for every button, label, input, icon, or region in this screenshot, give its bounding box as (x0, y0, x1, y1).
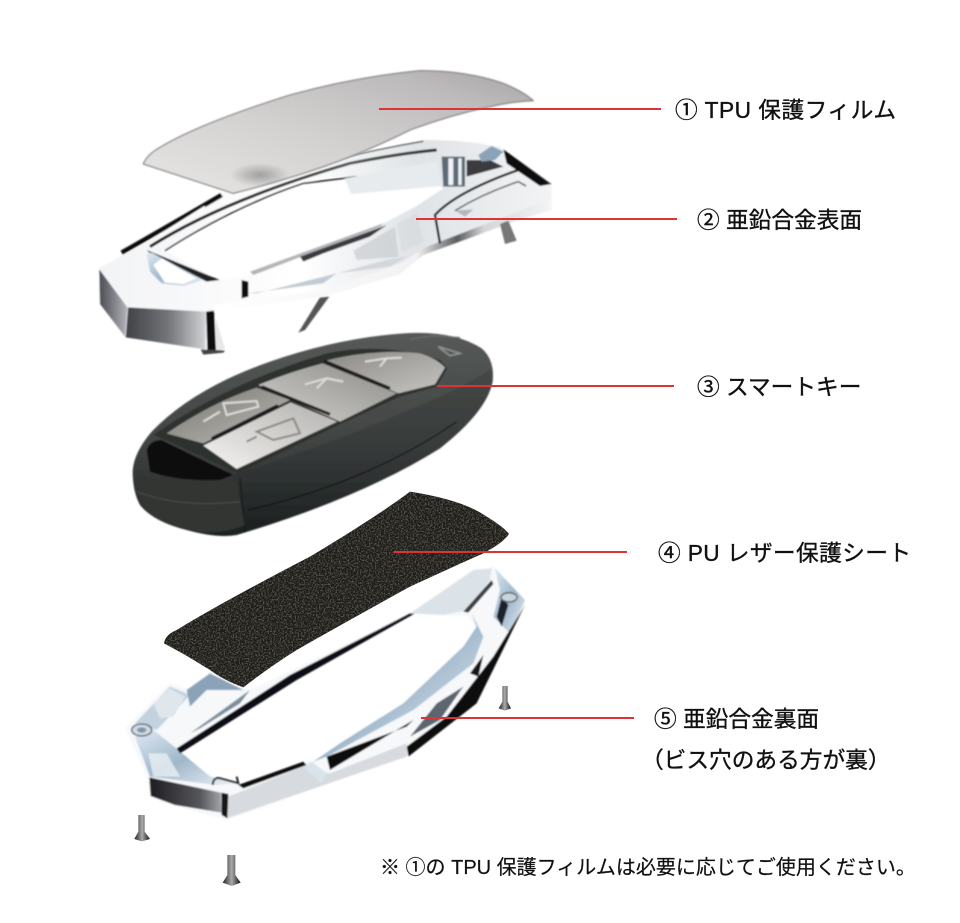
button glyphs (203, 358, 402, 442)
leader line 4 (394, 551, 627, 553)
black rim inner left (177, 613, 415, 753)
lower left hole (132, 724, 152, 736)
centre front face (126, 307, 205, 349)
bevel metallic bands (135, 687, 190, 730)
screw: right (499, 686, 511, 711)
support tabs (298, 297, 329, 333)
label 4: ④ PU レザー保護シート (658, 540, 911, 566)
blade end cap (147, 440, 233, 480)
button: upper left (167, 388, 290, 443)
leader line 5 (421, 717, 634, 719)
upper right tab (410, 568, 492, 615)
upper right hole (501, 593, 517, 602)
footnote: ※ ①の TPU 保護フィルムは必要に応じてご使用ください。 (380, 856, 916, 879)
frame body (99, 140, 552, 350)
label 3: ③ スマートキー (697, 374, 861, 400)
right rail (313, 613, 483, 762)
button: middle (258, 363, 397, 422)
screw: lower left (134, 815, 150, 841)
end-cap opening (147, 250, 220, 282)
lower rail black (238, 762, 307, 788)
frame: upper zinc alloy shell (99, 140, 552, 355)
leader line 1 (379, 108, 661, 110)
button: top right (324, 352, 445, 393)
front clip (213, 777, 238, 785)
raised facet lower rail (300, 225, 387, 262)
film: TPU protective film (143, 71, 533, 193)
key logo triangle (438, 347, 460, 356)
button: lower left (203, 402, 337, 469)
label 5: ⑤ 亜鉛合金裏面 (654, 706, 819, 732)
left front face (99, 269, 127, 337)
dark reflections (122, 195, 222, 253)
key body (133, 333, 493, 536)
label 1: ① TPU 保護フィルム (675, 97, 896, 123)
frame body (125, 565, 525, 820)
leader line 2 (416, 218, 677, 220)
bottom pins (201, 349, 225, 355)
screw: bottom (223, 855, 241, 886)
leather: PU protective sheet (164, 492, 509, 687)
button recess (153, 349, 447, 473)
leader line 3 (437, 385, 674, 387)
label 5 note: （ビス穴のある方が裏） (641, 747, 891, 773)
key: smart key fob (133, 333, 493, 536)
label 2: ② 亜鉛合金表面 (697, 207, 862, 233)
right side band (214, 198, 552, 312)
lower frame: zinc alloy back shell (125, 565, 525, 820)
inner wall (345, 162, 442, 194)
front face (149, 777, 222, 813)
film shadow (230, 163, 290, 187)
